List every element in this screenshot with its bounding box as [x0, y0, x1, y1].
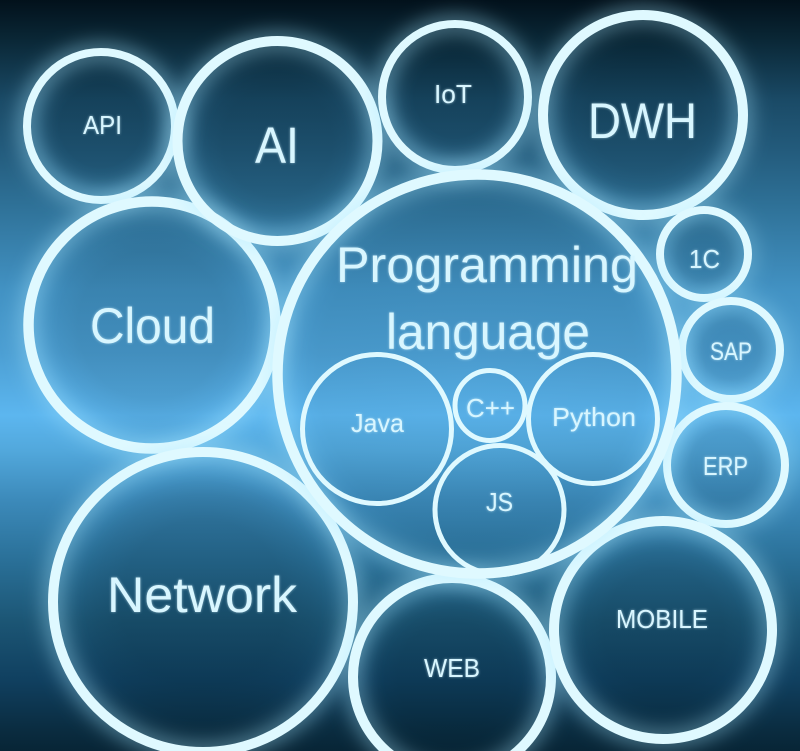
bubble: Cloud [28, 202, 276, 448]
bubble: IoT [382, 24, 528, 170]
bubble: MOBILE [554, 521, 772, 739]
sub-bubble: JS [435, 446, 564, 574]
bubble: Programming language [278, 174, 676, 574]
sub-bubble: Python: Python [552, 402, 636, 432]
bubble: ERP: ERP [703, 451, 748, 481]
bubble: IoT: IoT [434, 79, 472, 109]
bubble: Network [53, 452, 353, 751]
bubble: WEB [353, 578, 551, 751]
bubble: 1C: 1C [689, 244, 720, 274]
bubble: MOBILE: MOBILE [616, 604, 708, 634]
sub-bubble: JS: JS [486, 487, 513, 517]
bubble: DWH: DWH [588, 93, 697, 149]
bubble: API: API [83, 110, 122, 140]
sub-bubble: Python [528, 354, 658, 484]
bubble: AI: AI [255, 117, 299, 174]
bubble: Network: Network [107, 567, 298, 623]
bubble: SAP: SAP [710, 338, 752, 366]
bubble: AI [178, 41, 378, 241]
sub-bubble: C++ [455, 370, 525, 440]
bubble: SAP [682, 301, 780, 399]
bubble: API [27, 52, 175, 200]
bubble: 1C [660, 210, 748, 298]
bubble: ERP [667, 406, 785, 524]
sub-bubble: C++: C++ [466, 393, 515, 423]
bubble: Programming language: Programming [336, 237, 638, 293]
bubble: Cloud: Cloud [90, 298, 215, 354]
sub-bubble: Java: Java [351, 408, 405, 438]
bubble: WEB: WEB [424, 653, 480, 683]
sub-bubble: Java [302, 354, 452, 504]
bubble: Programming language: language [386, 304, 590, 360]
bubble: DWH [543, 15, 743, 215]
